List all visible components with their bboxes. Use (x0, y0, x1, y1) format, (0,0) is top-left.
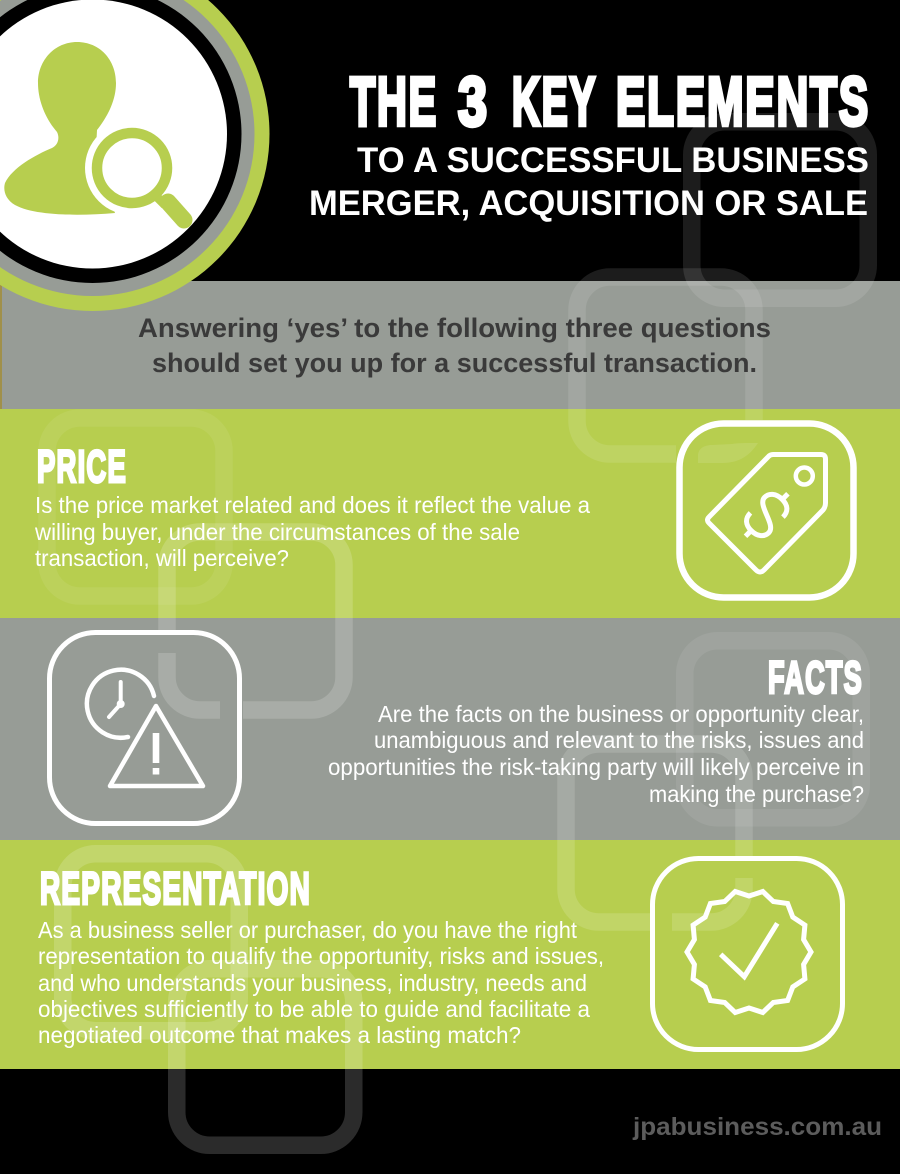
heading: representation: REPRESENTATION (40, 863, 311, 914)
intro text (138, 313, 771, 378)
title: TO A SUCCESSFUL BUSINESS (357, 141, 869, 180)
title: MERGER, ACQUISITION OR SALE (309, 184, 868, 223)
text block: facts question: Are the facts on the business or opportunity clear, (378, 701, 864, 727)
title: 3 (458, 63, 487, 140)
text block: price question: Is the price market related and does it reflect the value a (35, 492, 590, 518)
panel: price (34, 424, 854, 598)
intro text: Answering ‘yes’ to the following three questions (138, 313, 771, 343)
text block: representation question: and who understands your business, industry, needs and (38, 970, 587, 996)
title: KEY (512, 63, 597, 140)
text block: facts question (328, 701, 864, 807)
text block: representation question: negotiated outcome that makes a lasting match? (38, 1022, 521, 1048)
text block: price question: willing buyer, under the circumstances of the sale (34, 519, 520, 545)
icon: check badge (652, 858, 842, 1050)
website footer: jpabusiness.com.au (632, 1113, 882, 1141)
logo badge: person with magnifier (0, 0, 270, 311)
title (309, 63, 870, 223)
decorative chain links (47, 122, 868, 1145)
panel: representation (38, 858, 842, 1050)
icon: clock and warning triangle (50, 632, 240, 824)
text block: facts question: opportunities the risk-taking party will likely perceive in (328, 754, 864, 780)
text block: price question: transaction, will perceive? (35, 545, 289, 571)
heading: price: PRICE (37, 441, 127, 492)
text block: representation question: representation to qualify the opportunity, risks and issues, (38, 943, 604, 969)
text block: facts question: making the purchase? (649, 781, 864, 807)
text block: representation question: As a business seller or purchaser, do you have the right (38, 917, 578, 943)
icon: price tag (680, 424, 854, 598)
text block: representation question: objectives sufficiently to be able to guide and facilitate a (38, 996, 590, 1022)
text block: facts question: unambiguous and relevant to the risks, issues and (374, 727, 864, 753)
title: THE (350, 63, 438, 140)
panel: facts (50, 632, 864, 824)
text block: representation question (38, 917, 604, 1048)
intro text: should set you up for a successful transaction. (152, 348, 757, 378)
text block: price question (34, 492, 590, 571)
